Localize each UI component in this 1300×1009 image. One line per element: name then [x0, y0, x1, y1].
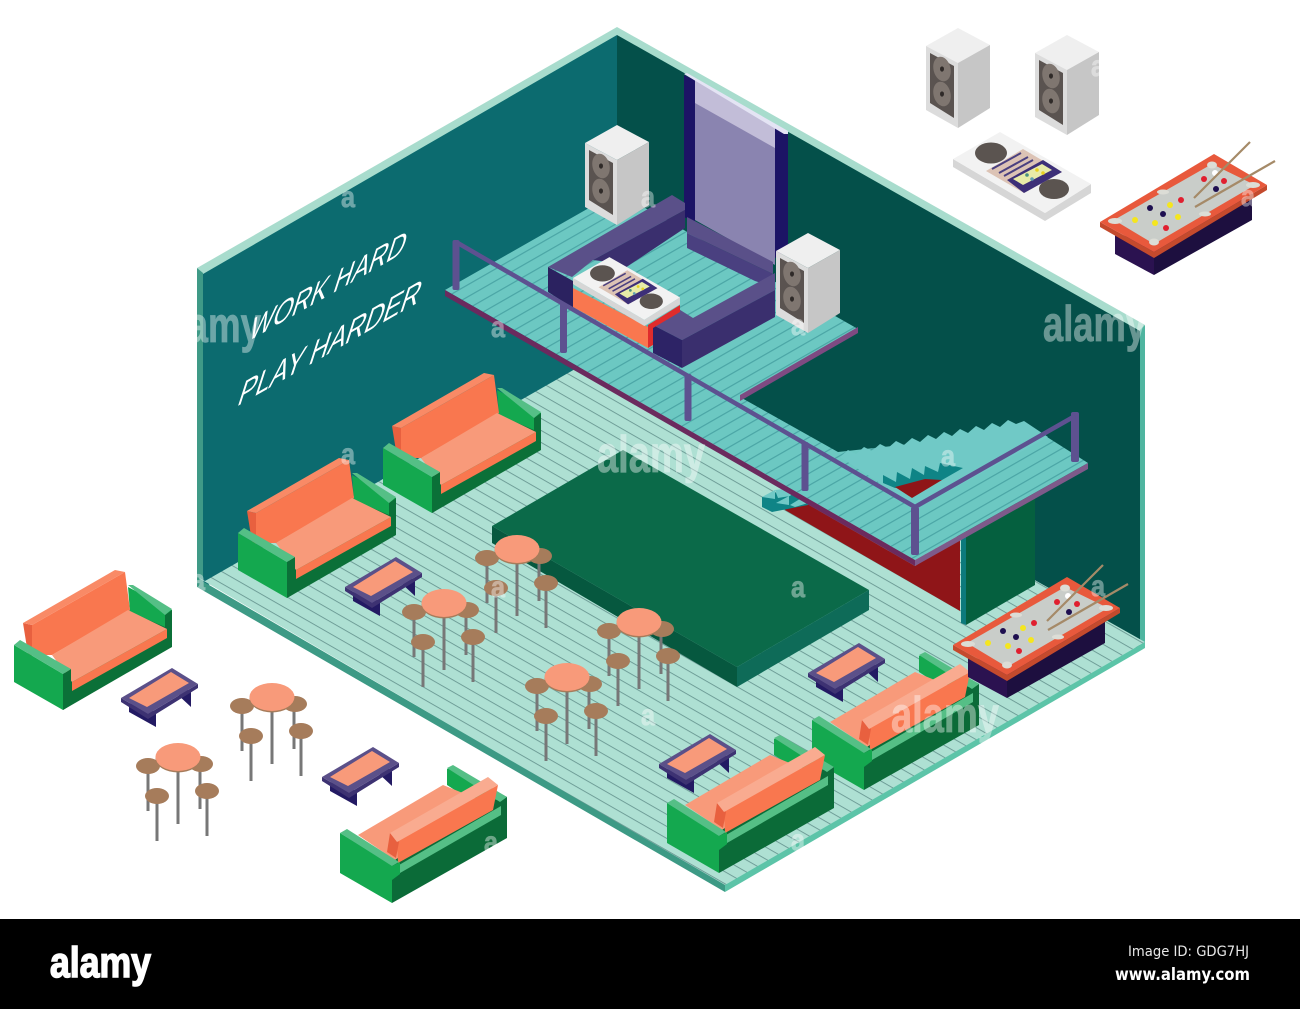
- coffee table right upper: [808, 643, 885, 702]
- watermarks: a: [491, 571, 505, 604]
- watermarks: alamy: [891, 687, 999, 743]
- bar table 4: [525, 663, 608, 761]
- deck: [445, 192, 1088, 560]
- image id: Image ID: GDG7HJ: [1128, 944, 1249, 960]
- watermarks: a: [1241, 180, 1255, 213]
- spare coffee table 2: [322, 747, 399, 806]
- watermarks: alamy: [157, 297, 261, 353]
- watermarks: a: [484, 826, 498, 859]
- coffee table right lower: [659, 734, 736, 793]
- sofa upper left: [383, 373, 541, 513]
- bar table 3: [597, 608, 680, 706]
- backdrop screen: [684, 73, 788, 265]
- sofa right lower: [667, 735, 834, 873]
- deck edge left: [445, 290, 915, 566]
- left bench: [548, 195, 685, 308]
- sofa left: [238, 458, 396, 598]
- spare speaker 2: [1035, 35, 1099, 135]
- watermarks: a: [341, 438, 355, 471]
- staircase: [840, 420, 1048, 508]
- room shell: [197, 27, 1145, 892]
- floor: [197, 345, 1145, 886]
- spare speaker 1: [926, 28, 990, 128]
- back bench: [687, 217, 773, 287]
- speaker left: [585, 125, 649, 225]
- footer bar: [0, 919, 1300, 1009]
- work hard text: WORK HARD: [245, 222, 413, 349]
- floor slab edge right: [725, 642, 1145, 892]
- watermarks: a: [1091, 50, 1105, 83]
- watermarks: a: [341, 181, 355, 214]
- spare coffee table 1: [121, 668, 198, 727]
- watermarks: a: [491, 311, 505, 344]
- lower stair steps: [762, 487, 808, 512]
- dj booth: [548, 73, 840, 368]
- watermarks: a: [791, 571, 805, 604]
- sofa right upper: [812, 652, 979, 790]
- spare dj console: [953, 132, 1091, 221]
- spare bar table 1: [136, 743, 219, 841]
- wall top trim: [197, 27, 1145, 648]
- railing: [452, 240, 1079, 555]
- right wall: [617, 33, 1140, 650]
- watermarks: a: [191, 564, 205, 597]
- watermarks: a: [1091, 570, 1105, 603]
- coffee table left: [345, 557, 422, 616]
- deck edge right: [915, 463, 1088, 566]
- stage platform: [492, 450, 869, 687]
- wall slogan: [233, 222, 427, 415]
- billiard table in room: [953, 565, 1128, 698]
- bar table 2: [402, 589, 485, 687]
- play harder text: PLAY HARDER: [233, 271, 427, 415]
- speaker right: [776, 233, 840, 333]
- watermarks: a: [641, 699, 655, 732]
- console on booth: [573, 257, 680, 326]
- stair well: [883, 463, 963, 498]
- watermarks: [157, 50, 1255, 859]
- booth front: [573, 288, 680, 348]
- spare bar table 2: [230, 683, 313, 781]
- bar table 1: [475, 535, 558, 633]
- watermarks: a: [791, 824, 805, 857]
- red wall under mezzanine: [785, 494, 960, 611]
- mezzanine: [445, 192, 1088, 566]
- right bench: [653, 273, 775, 368]
- green door: [961, 498, 1035, 625]
- website: www.alamy.com: [1115, 965, 1250, 984]
- spare sofa back: [340, 765, 507, 903]
- watermarks: a: [791, 309, 805, 342]
- left wall: [203, 33, 617, 588]
- floor slab edge: [197, 578, 725, 892]
- dj platform edge: [740, 327, 858, 401]
- alamy logo: alamy: [50, 939, 151, 987]
- watermarks: a: [641, 181, 655, 214]
- watermarks: a: [941, 440, 955, 473]
- spare sofa front: [14, 570, 172, 710]
- spare billiard table: [1100, 142, 1275, 275]
- watermarks: alamy: [597, 426, 705, 484]
- watermarks: alamy: [1043, 296, 1146, 352]
